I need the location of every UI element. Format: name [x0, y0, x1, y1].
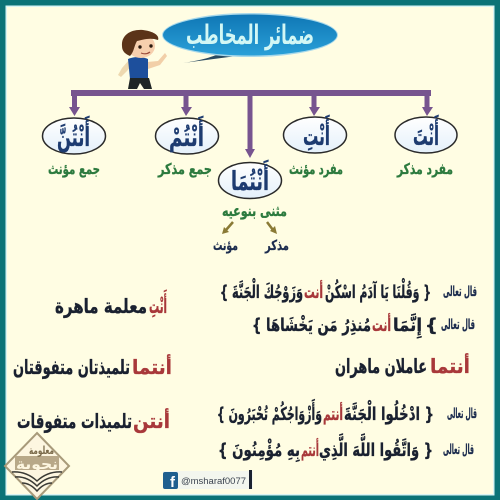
example: antunna students: تلميذات متفوقات	[17, 409, 132, 433]
example: antuma students: تلميذتان متفوقتان	[13, 355, 130, 379]
example: antuma students: أنتما	[132, 353, 172, 379]
label: feminine singular: مفرد مؤنث	[289, 160, 343, 178]
label: masculine: مذكر	[264, 238, 289, 254]
title speech bubble	[162, 13, 338, 63]
icon: boy pointing at the bubble	[118, 30, 167, 89]
pronoun node: antum	[156, 116, 218, 178]
verse line 4: بِهِ مُؤْمِنُونَ }	[218, 439, 300, 463]
logo badge with book: معلومة	[29, 444, 54, 457]
example: antuma working men: عاملان ماهران	[335, 354, 427, 378]
pronoun node: anta: أَنْتَ	[413, 115, 439, 152]
title: ضمائر المخاطب	[186, 20, 314, 51]
pronoun node: anti: أَنْتِ	[303, 115, 330, 152]
example: antuma working men: أنتما	[430, 352, 470, 378]
verse line 1: وَزَوْجُكَ الْجَنَّةَ }	[220, 278, 303, 303]
social media tag: f	[170, 474, 176, 491]
verse line 1	[220, 278, 477, 303]
social media tag	[163, 470, 253, 491]
label: feminine: مؤنث	[213, 238, 238, 254]
logo badge with book	[5, 433, 69, 499]
tree connector with arrows	[69, 90, 433, 158]
verse line 2: {	[425, 315, 438, 336]
social media tag: @msharaf0077	[181, 476, 246, 486]
verse line 1: { وَقُلْنَا يَا آدَمُ اسْكُنْ	[325, 278, 431, 303]
verse line 2: إِنَّمَا	[393, 313, 422, 339]
pronoun node: antunna	[42, 116, 106, 178]
example: anti teacher: معلمة ماهرة	[55, 294, 147, 318]
verse line 2: أنت	[372, 313, 391, 336]
label: masculine plural: جمع مذكر	[157, 160, 212, 178]
pronoun node: anta	[395, 115, 457, 178]
example: antunna students: أنتن	[133, 407, 170, 433]
verse line 4: أنتم	[301, 438, 319, 461]
verse line 2: مُنذِرُ مَن يَخْشَاهَا }	[252, 315, 371, 336]
verse line 2	[252, 313, 475, 339]
verse line 3: أنتم	[323, 402, 343, 425]
pronoun node: antuma: أَنْتُمَا	[231, 160, 269, 197]
label: feminine plural: جمع مؤنث	[48, 160, 100, 178]
label: masculine singular: مفرد مذكر	[396, 160, 453, 178]
pronoun node: antunna: أَنْتُنَّ	[57, 116, 90, 153]
label: dual of both kinds: مثنى بنوعيه	[222, 202, 287, 220]
verse line 1: أنت	[304, 280, 323, 303]
logo badge with book: نحوية	[16, 455, 58, 473]
verse line 4	[218, 433, 474, 463]
pronoun node: antum: أَنْتُمْ	[169, 116, 204, 153]
verse line 4: { وَاتَّقُوا اللَّهَ الَّذِي	[319, 433, 433, 461]
verse line 3: وَأَزْوَاجُكُمْ تُحْبَرُونَ }	[217, 398, 322, 425]
verse line 3	[217, 398, 477, 425]
pronoun node: antuma	[218, 160, 287, 220]
example: anti teacher: أَنْتِ	[149, 289, 167, 318]
pronoun node: anti	[284, 115, 346, 178]
verse line 3: { ادْخُلُوا الْجَنَّةَ	[344, 399, 434, 425]
small arrows from dual to genders	[222, 222, 277, 234]
